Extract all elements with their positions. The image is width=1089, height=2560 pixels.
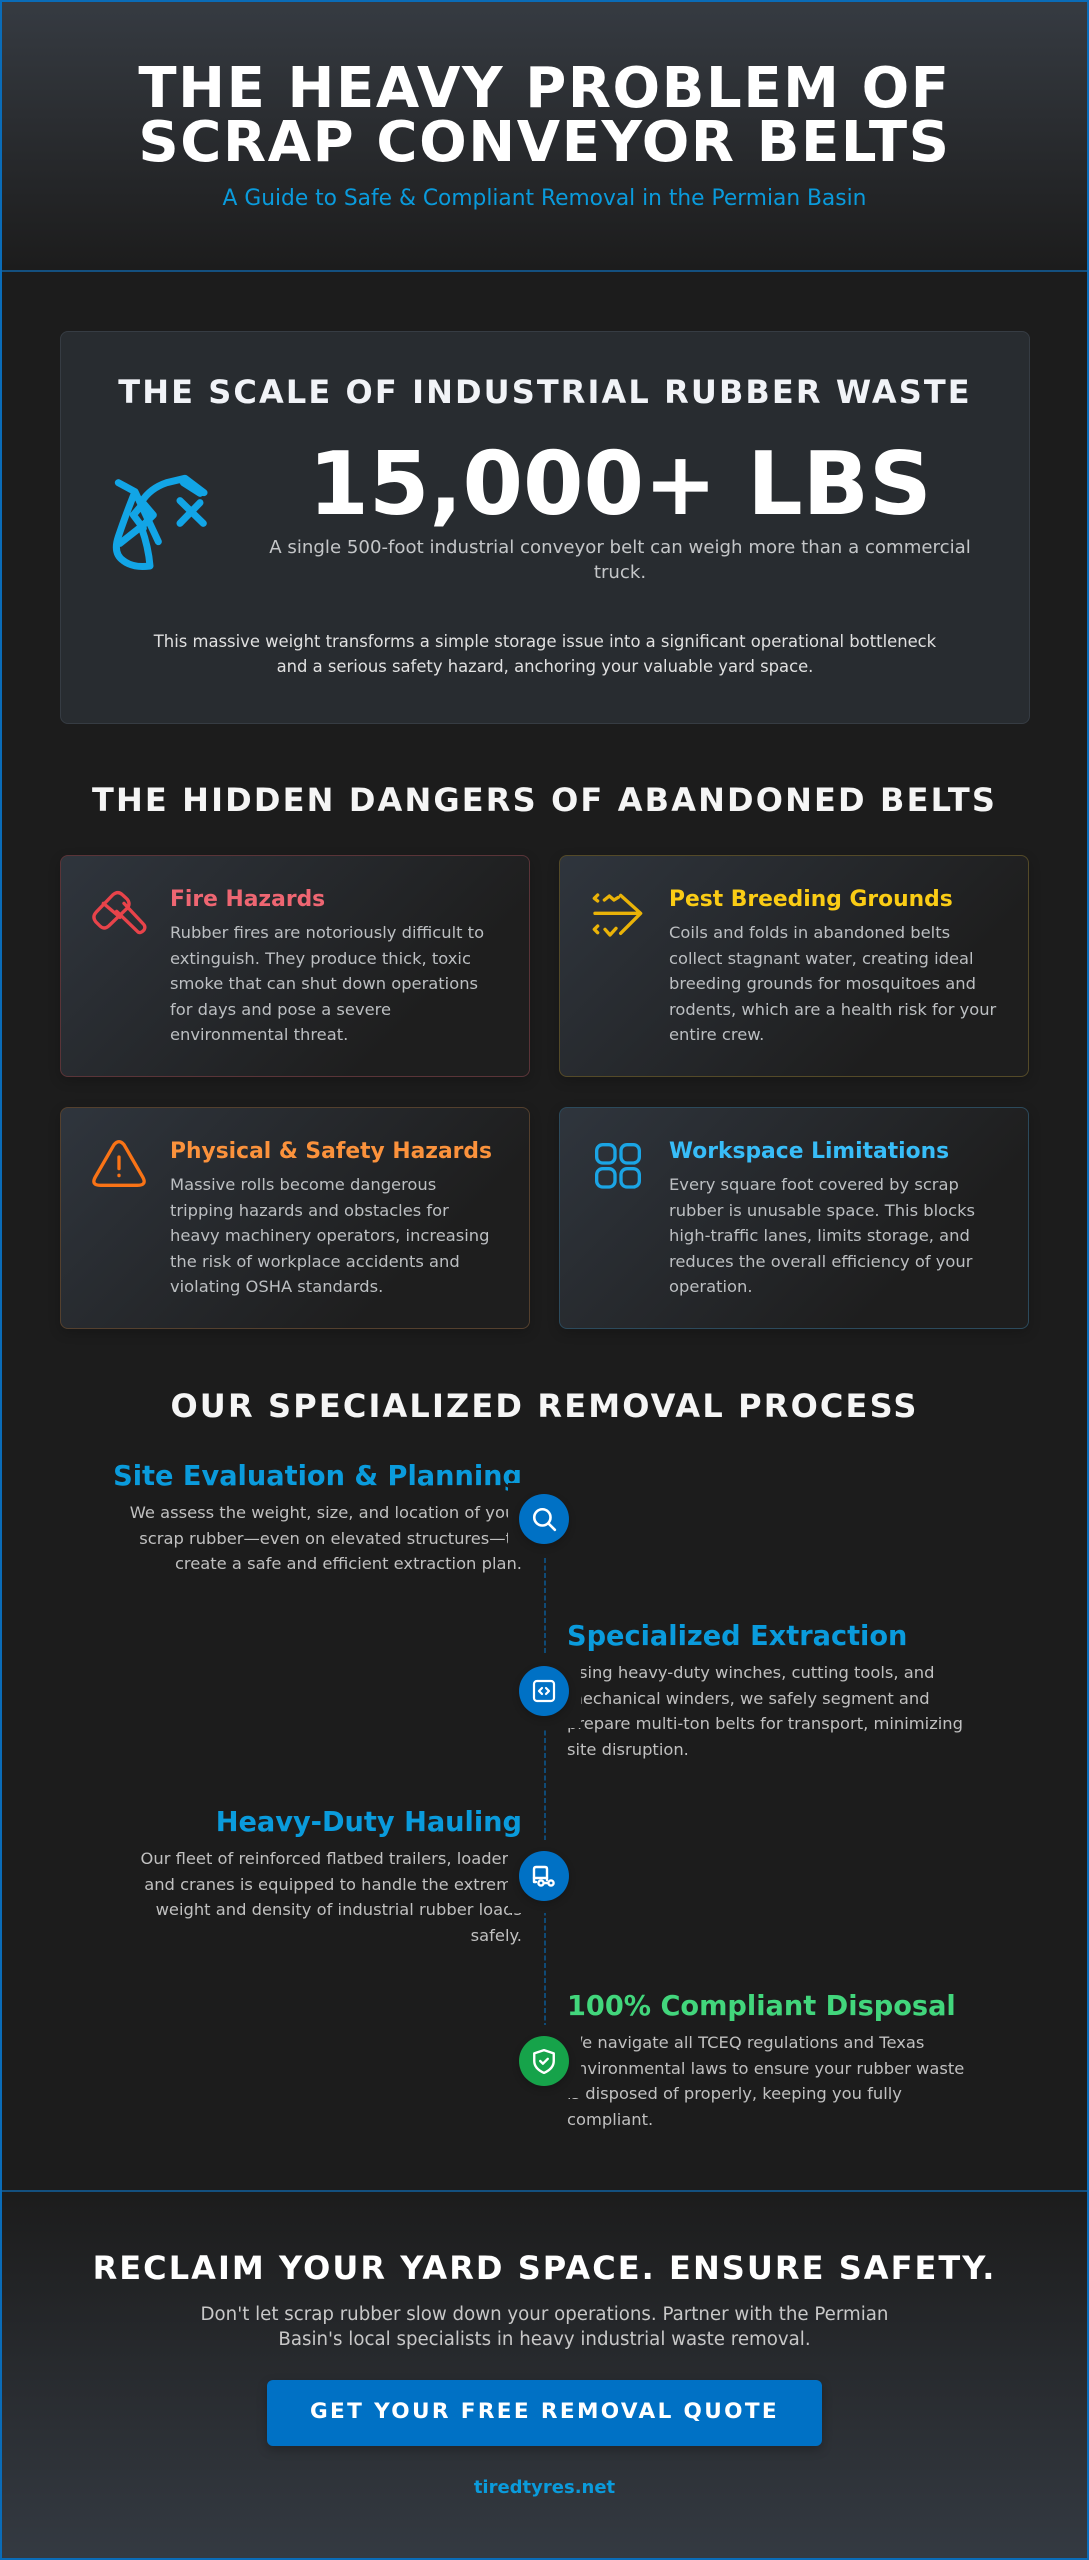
fire text: environmental threat. xyxy=(170,1025,348,1044)
title: THE HEAVY PROBLEM OF xyxy=(138,56,951,120)
pest text: breeding grounds for mosquitoes and xyxy=(669,974,976,993)
physical text xyxy=(170,1175,489,1296)
step 4 body: We navigate all TCEQ regulations and Texas xyxy=(567,2033,924,2052)
panel: workspace limitations xyxy=(559,1107,1029,1329)
button: GET YOUR FREE REMOVAL QUOTE xyxy=(310,2399,779,2424)
step 3 body: and cranes is equipped to handle the extreme xyxy=(144,1874,522,1894)
heading: scale: THE SCALE OF INDUSTRIAL RUBBER WASTE xyxy=(118,373,972,411)
step 1 marker xyxy=(508,1483,581,1556)
button xyxy=(267,2380,822,2446)
step 4 body xyxy=(567,2033,964,2128)
pest text: Coils and folds in abandoned belts xyxy=(669,923,950,942)
physical text: violating OSHA standards. xyxy=(170,1277,383,1296)
step 4 title: 100% Compliant Disposal xyxy=(567,1991,956,2022)
pest text: rodents, which are a health risk for your xyxy=(669,1000,996,1018)
fire text: for days and pose a severe xyxy=(170,1000,391,1018)
step 3 title: Heavy-Duty Hauling xyxy=(216,1806,522,1838)
pest text: entire crew. xyxy=(669,1025,764,1044)
panel: pest breeding xyxy=(559,855,1029,1077)
physical title: Physical & Safety Hazards xyxy=(170,1138,492,1164)
step 2 title: Specialized Extraction xyxy=(567,1621,907,1652)
title xyxy=(138,56,951,174)
icon: code box xyxy=(519,1666,569,1716)
fire text: Rubber fires are notoriously difficult to xyxy=(170,923,484,942)
workspace text: Every square foot covered by scrap xyxy=(669,1175,959,1194)
heading: removal process: OUR SPECIALIZED REMOVAL PROCESS xyxy=(170,1387,919,1425)
step 4 body: environmental laws to ensure your rubber waste xyxy=(567,2058,964,2078)
icon: shield check xyxy=(519,2036,569,2086)
step 2 body: mechanical winders, we safely segment and xyxy=(567,1688,930,1708)
icon: arrow with pests xyxy=(592,893,642,937)
stat caption: truck. xyxy=(594,562,646,583)
fire title: Fire Hazards xyxy=(170,886,325,912)
workspace text: operation. xyxy=(669,1277,753,1296)
workspace text: high-traffic lanes, limits storage, and xyxy=(669,1226,970,1245)
step 1 body: create a safe and efficient extraction plan. xyxy=(175,1554,522,1573)
workspace title: Workspace Limitations xyxy=(669,1138,949,1164)
step 2 text xyxy=(567,1621,963,1758)
step 3 marker xyxy=(508,1840,581,1913)
step 3 body: Our fleet of reinforced flatbed trailers, loaders, xyxy=(141,1849,522,1868)
paragraph: and a serious safety hazard, anchoring your valuable yard space. xyxy=(277,657,813,676)
step 1 text xyxy=(113,1461,522,1573)
pest text xyxy=(669,923,996,1044)
workspace text xyxy=(669,1175,975,1296)
footer heading: RECLAIM YOUR YARD SPACE. ENSURE SAFETY. xyxy=(93,2249,996,2287)
icon: grid squares xyxy=(595,1143,641,1189)
icon: warning triangle xyxy=(92,1140,146,1187)
fire text xyxy=(170,923,484,1044)
timeline line xyxy=(544,1483,546,2061)
footer text xyxy=(201,2304,888,2350)
stat caption xyxy=(269,537,971,583)
footer text: Don't let scrap rubber slow down your operations. Partner with the Permian xyxy=(201,2304,888,2325)
big number: 15,000+ LBS xyxy=(308,433,932,535)
physical text: heavy machinery operators, increasing xyxy=(170,1226,489,1245)
header xyxy=(0,0,1089,272)
step 3 body: weight and density of industrial rubber loads xyxy=(156,1900,522,1919)
icon: search xyxy=(519,1494,569,1544)
fire text: extinguish. They produce thick, toxic xyxy=(170,948,471,968)
step 2 marker xyxy=(508,1655,581,1728)
step 1 body: scrap rubber—even on elevated structures—to xyxy=(139,1528,522,1548)
icon: truck xyxy=(519,1851,569,1901)
step 4 body: compliant. xyxy=(567,2110,653,2128)
workspace text: rubber is unusable space. This blocks xyxy=(669,1200,975,1220)
stat caption: A single 500-foot industrial conveyor belt can weigh more than a commercial xyxy=(269,537,971,558)
step 4 marker xyxy=(508,2025,581,2098)
pest title: Pest Breeding Grounds xyxy=(669,886,953,912)
footer text: Basin's local specialists in heavy industrial waste removal. xyxy=(278,2329,811,2350)
paragraph xyxy=(154,632,936,676)
step 3 body xyxy=(141,1849,522,1944)
website link: tiredtyres.net xyxy=(474,2477,615,2498)
step 3 body: safely. xyxy=(471,1926,522,1944)
subtitle: A Guide to Safe & Compliant Removal in the Permian Basin xyxy=(223,186,866,210)
workspace text: reduces the overall efficiency of your xyxy=(669,1252,972,1270)
step 2 body xyxy=(567,1663,963,1758)
step 1 title: Site Evaluation & Planning xyxy=(113,1461,522,1492)
icon: fire extinguisher tool xyxy=(92,890,147,934)
step 1 body xyxy=(130,1503,522,1573)
icon: tangled belt xyxy=(112,474,208,570)
step 3 text xyxy=(141,1806,522,1944)
step 2 body: prepare multi-ton belts for transport, minimizing xyxy=(567,1714,963,1733)
heading: hidden dangers: THE HIDDEN DANGERS OF ABANDONED BELTS xyxy=(92,781,997,819)
fire text: smoke that can shut down operations xyxy=(170,974,478,993)
step 4 body: is disposed of properly, keeping you fully xyxy=(567,2084,902,2103)
panel: fire hazards xyxy=(60,855,530,1077)
step 1 body: We assess the weight, size, and location of your xyxy=(130,1503,522,1522)
physical text: Massive rolls become dangerous xyxy=(170,1175,436,1194)
step 2 body: Using heavy-duty winches, cutting tools, and xyxy=(567,1663,934,1682)
panel: physical hazards xyxy=(60,1107,530,1329)
footer call to action xyxy=(0,2190,1089,2560)
step 4 text xyxy=(567,1991,964,2128)
physical text: tripping hazards and obstacles for xyxy=(170,1200,449,1220)
physical text: the risk of workplace accidents and xyxy=(170,1252,460,1270)
panel: scale of waste xyxy=(60,331,1030,724)
paragraph: This massive weight transforms a simple storage issue into a significant operational bottleneck xyxy=(154,632,936,651)
title: SCRAP CONVEYOR BELTS xyxy=(138,110,951,174)
step 2 body: site disruption. xyxy=(567,1740,689,1758)
pest text: collect stagnant water, creating ideal xyxy=(669,948,974,968)
